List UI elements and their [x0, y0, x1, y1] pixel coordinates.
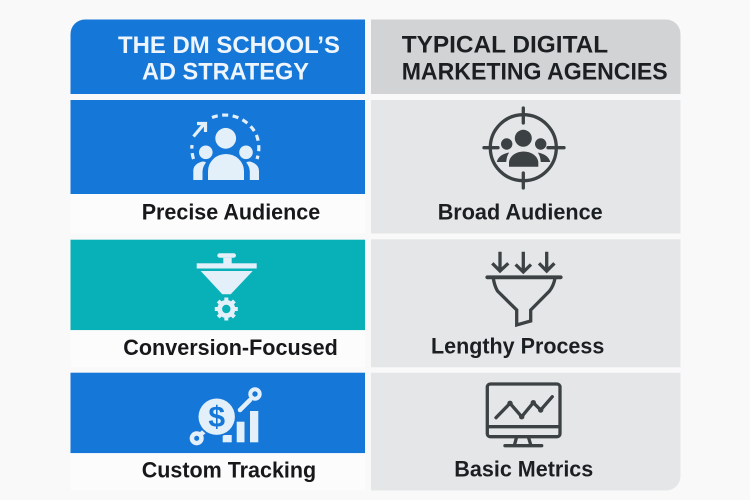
icon: funnel with gear — [197, 253, 257, 320]
heading: The DM School's ad strategy: AD STRATEGY — [142, 58, 309, 86]
icon: audience in crosshair — [484, 108, 564, 188]
icon: dollar coin with growth bars: $ — [208, 401, 225, 434]
icon: monitor with line chart — [487, 384, 560, 446]
label: Conversion-Focused: Conversion-Focused — [123, 335, 338, 360]
icon: funnel with three arrows — [487, 252, 561, 325]
label: Custom Tracking: Custom Tracking — [142, 457, 316, 482]
panel: precise audience — [70, 100, 365, 234]
label: Lengthy Process: Lengthy Process — [431, 333, 604, 358]
label: Precise Audience: Precise Audience — [142, 199, 320, 224]
heading: typical digital marketing agencies: MARKETING AGENCIES — [402, 58, 668, 86]
heading: typical digital marketing agencies: TYPICAL DIGITAL — [402, 32, 608, 58]
panel: broad audience — [371, 100, 680, 234]
panel: basic metrics — [371, 373, 680, 490]
label: Basic Metrics: Basic Metrics — [454, 457, 593, 482]
heading: The DM School's ad strategy — [70, 20, 365, 94]
heading: The DM School's ad strategy: THE DM SCHOOL’S — [118, 32, 340, 59]
icon: dollar coin with growth bars — [192, 389, 260, 443]
column: typical digital marketing agencies — [371, 20, 680, 490]
panel: lengthy process — [371, 239, 680, 367]
label: Broad Audience: Broad Audience — [438, 199, 603, 224]
heading: typical digital marketing agencies — [371, 20, 680, 94]
column: The DM School's ad strategy — [70, 20, 365, 490]
icon: audience with dashed target arc — [192, 115, 259, 180]
panel: conversion-focused — [70, 240, 365, 367]
panel: custom tracking — [70, 373, 365, 490]
